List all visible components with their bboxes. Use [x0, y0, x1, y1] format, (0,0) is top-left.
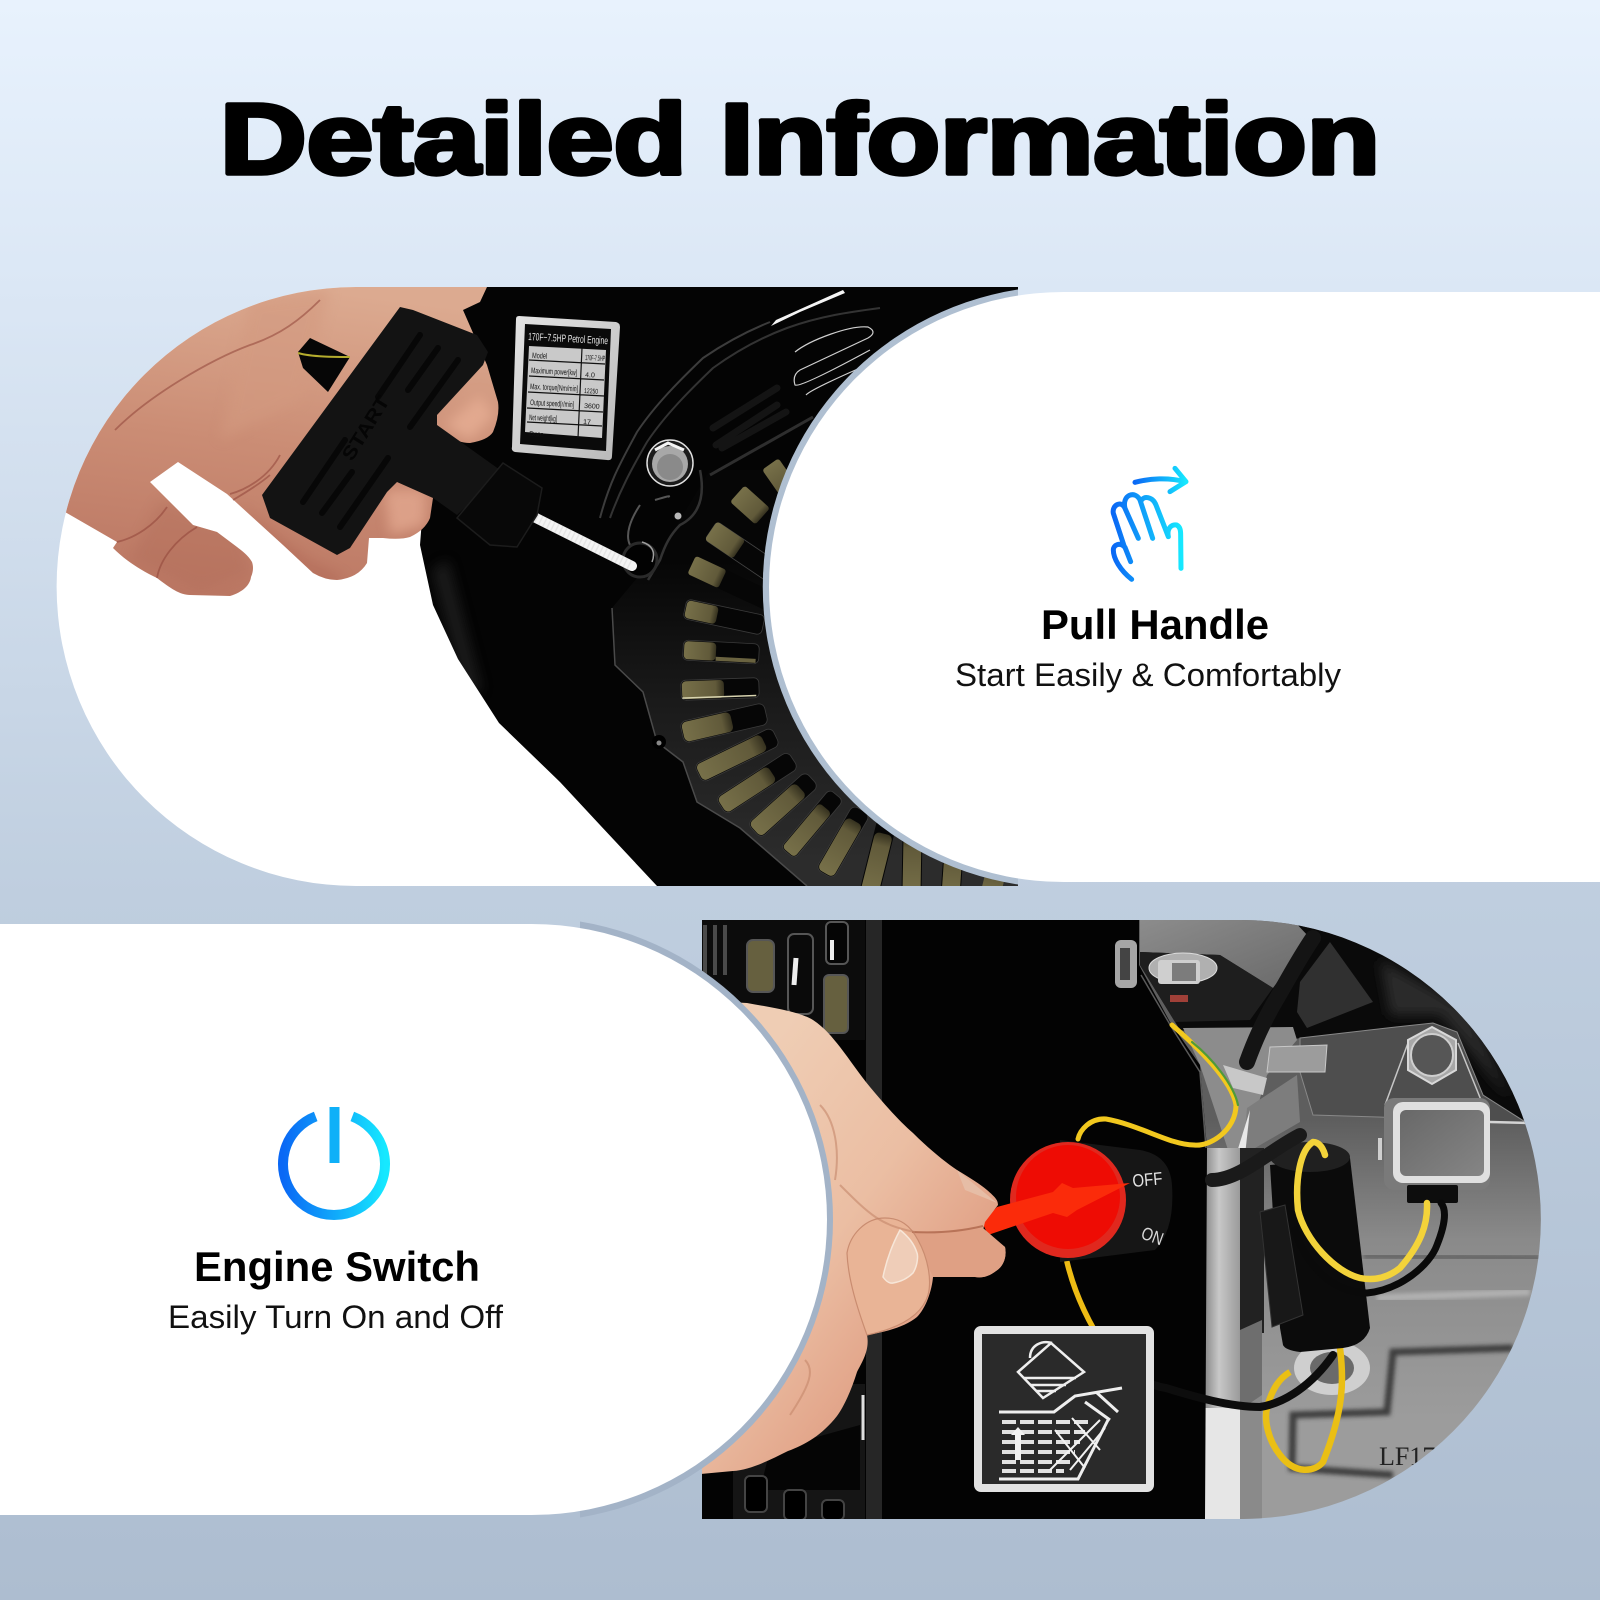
spec label: 3600 — [584, 403, 600, 411]
photo background — [56, 287, 657, 886]
hand shading — [130, 290, 494, 590]
upper grille — [702, 920, 882, 1520]
heading: pull handle: Pull Handle — [1041, 601, 1269, 648]
mount bolt — [1385, 1027, 1483, 1105]
spec label: Model — [532, 351, 547, 361]
lower yellow loop — [1266, 1348, 1342, 1470]
sensor box — [1378, 1098, 1490, 1203]
finger nail — [957, 1170, 997, 1203]
warning label — [978, 1330, 1150, 1488]
washer — [1294, 1341, 1370, 1395]
spec label: 12250 — [584, 388, 598, 396]
lower finger — [912, 1228, 1006, 1277]
skin creases — [115, 300, 320, 578]
panel ring — [763, 290, 1018, 884]
spec label: 170F-7.5HP — [585, 353, 605, 363]
panel: pull handle photo — [56, 287, 1018, 886]
spec label: Maximum power[kw] — [531, 366, 577, 377]
heading: engine switch: Engine Switch — [194, 1243, 480, 1290]
wires — [1067, 938, 1444, 1407]
yellow wire — [298, 353, 350, 357]
icon: hand swipe — [1113, 468, 1186, 579]
panel: engine switch photo — [690, 920, 1549, 1520]
engine body — [420, 287, 1018, 886]
spec label: Net weight[kg] — [529, 413, 557, 423]
subtext: engine switch: Easily Turn On and Off — [168, 1299, 503, 1335]
engine casing — [1139, 920, 1549, 1520]
panel ring — [580, 922, 833, 1518]
recoil guard plate — [599, 290, 1018, 886]
OFF text: OFF — [1132, 1168, 1163, 1191]
title: Detailed Information — [220, 84, 1380, 196]
subtext: pull handle: Start Easily & Comfortably — [955, 657, 1341, 693]
lower grille — [733, 1384, 865, 1520]
vents — [680, 458, 1006, 899]
spec label: 17 — [583, 419, 591, 426]
spec label: Date — [529, 431, 544, 439]
upper bolts — [1115, 940, 1217, 1002]
bolt — [647, 440, 693, 486]
red pointer — [982, 1183, 1130, 1235]
hand — [690, 1000, 1006, 1475]
spec label: Output speed[r/min] — [530, 398, 574, 409]
spec label: 4.0 — [585, 372, 595, 380]
handle collar — [457, 463, 542, 547]
spec label — [512, 316, 620, 460]
hand — [30, 280, 498, 596]
ON text: ON — [1139, 1223, 1166, 1249]
white card — [769, 292, 1600, 882]
panel: pull handle text — [763, 290, 1600, 884]
T handle: START — [338, 392, 395, 465]
panel: engine switch text — [0, 922, 833, 1518]
black cylinder — [1260, 1142, 1370, 1352]
rope — [528, 514, 632, 566]
LF170 casting: LF170 — [1379, 1442, 1448, 1471]
icon: power — [283, 1107, 385, 1215]
engine switch — [982, 1140, 1172, 1262]
rope hole — [623, 542, 657, 577]
thumb nail — [883, 1230, 918, 1283]
spec label: Max. torque[Nm/min] — [530, 382, 578, 394]
housing bracket edge — [1141, 975, 1206, 1148]
thumb — [847, 1218, 930, 1335]
T handle — [262, 307, 542, 555]
white card — [0, 924, 827, 1515]
finger gap — [298, 338, 350, 392]
red knob — [1010, 1142, 1126, 1258]
black housing — [700, 920, 1207, 1520]
spec label: 170F−7.5HP Petrol Engine — [528, 331, 608, 347]
